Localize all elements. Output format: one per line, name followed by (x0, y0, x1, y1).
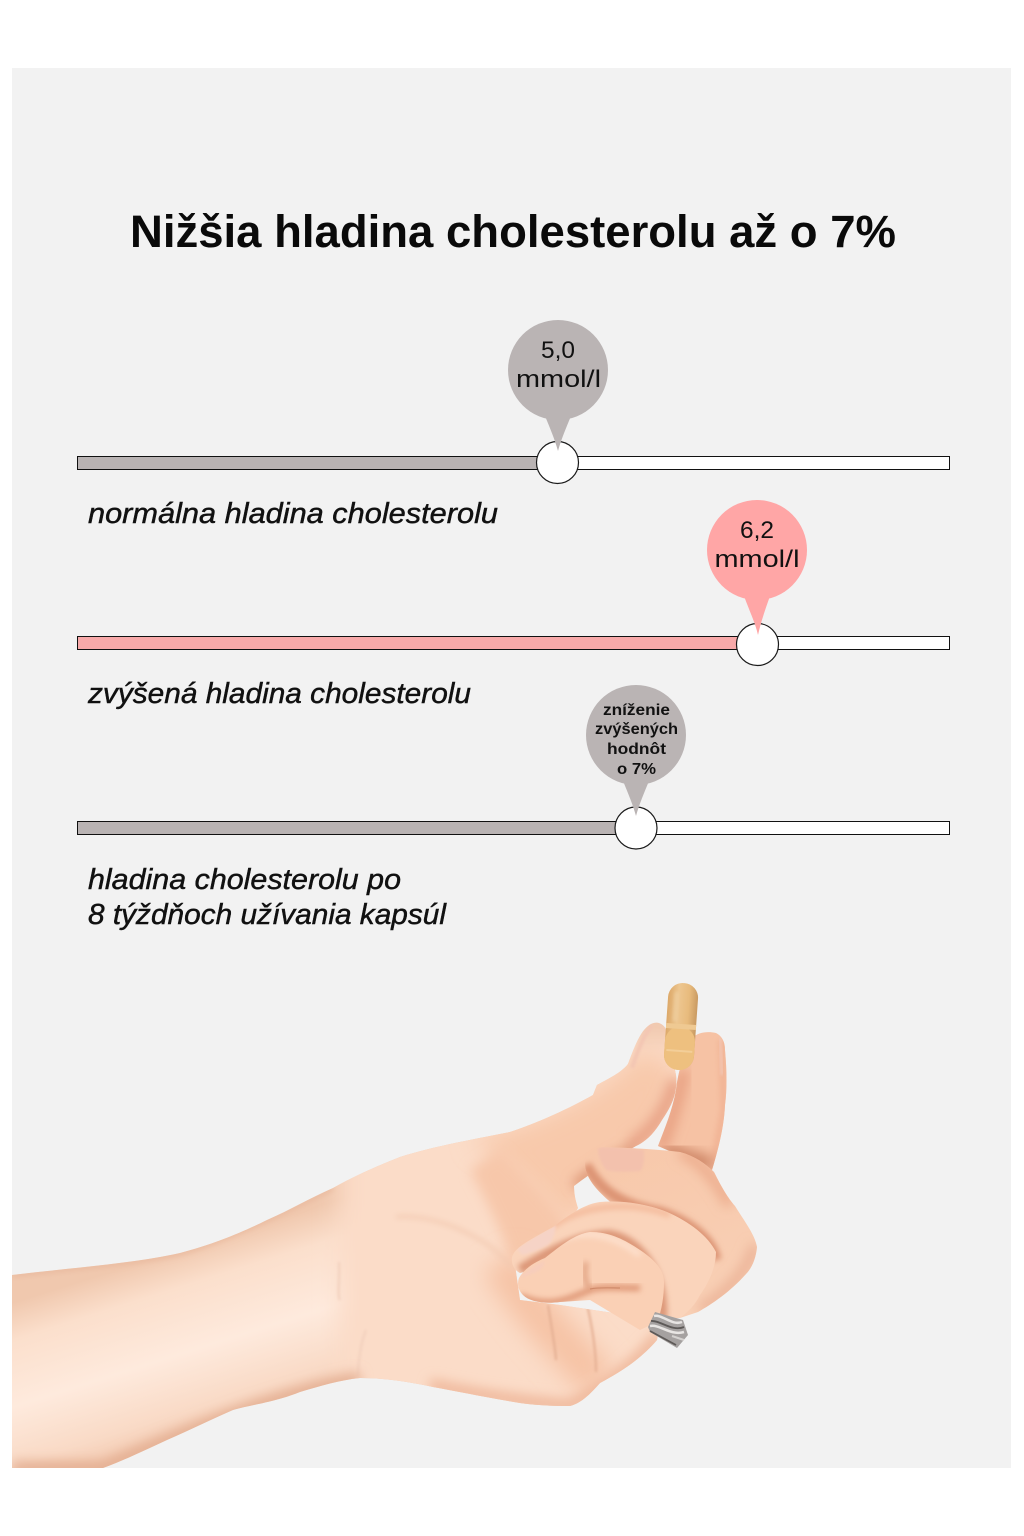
slider: level after 8 weeks (78, 685, 950, 931)
value bubble: 5,0 mmol/l (508, 320, 608, 451)
slider caption: zvýšená hladina cholesterolu (87, 678, 471, 710)
fingernail (520, 1261, 545, 1278)
slider fill (78, 822, 626, 834)
slider: elevated cholesterol level (78, 500, 950, 710)
slider knob (536, 442, 578, 484)
value bubble: reduction by 7%: zvýšených (595, 721, 678, 738)
slider caption: normálna hladina cholesterolu (88, 498, 498, 530)
value bubble: reduction by 7%: hodnôt (607, 741, 667, 758)
value bubble: reduction by 7% (586, 685, 686, 816)
little finger (518, 1232, 664, 1330)
ring finger (512, 1202, 716, 1318)
capsule (663, 982, 699, 1071)
slider fill (78, 457, 548, 469)
slider knob (615, 807, 657, 849)
value bubble: 6,2 mmol/l: 6,2 (740, 517, 774, 544)
value bubble: 5,0 mmol/l: 5,0 (541, 337, 575, 364)
value bubble: 5,0 mmol/l: mmol/l (516, 366, 601, 393)
slider: normal cholesterol level (78, 320, 950, 530)
slider track (78, 456, 950, 470)
arm, palm and thumb (12, 1022, 676, 1468)
slider caption: hladina cholesterolu po (88, 864, 401, 896)
slider track (78, 822, 950, 834)
title: Nižšia hladina cholesterolu až o 7% (130, 206, 896, 257)
fingernail (517, 1225, 556, 1255)
slider track (78, 636, 950, 650)
middle finger (658, 1032, 726, 1170)
slider caption (88, 864, 448, 931)
slider caption: 8 týždňoch užívania kapsúl (88, 899, 448, 931)
value bubble: 6,2 mmol/l (707, 500, 807, 635)
value bubble: 6,2 mmol/l: mmol/l (714, 546, 800, 573)
value bubble: reduction by 7%: zníženie (603, 702, 670, 719)
slider fill (78, 637, 746, 649)
value bubble: reduction by 7%: o 7% (617, 761, 656, 778)
slider knob (736, 624, 778, 666)
hand holding a capsule (0, 982, 800, 1480)
ring (648, 1312, 688, 1348)
index finger (585, 1148, 757, 1318)
fingernail (622, 1161, 641, 1170)
